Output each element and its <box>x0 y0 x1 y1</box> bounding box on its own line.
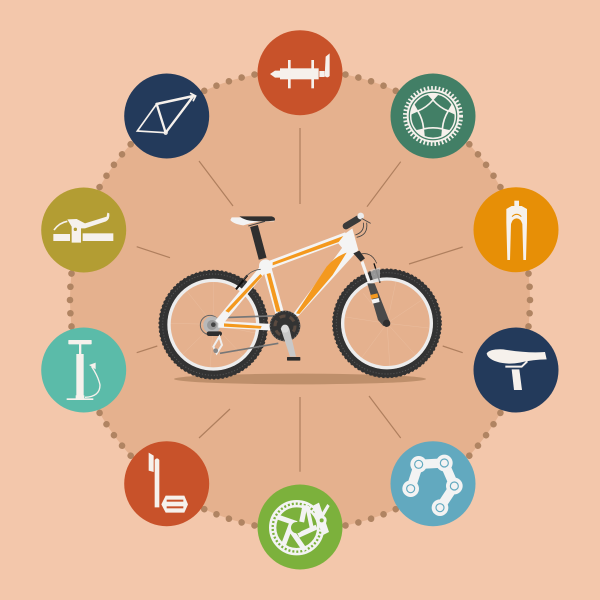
saddle <box>230 216 275 226</box>
icon: bike frame <box>124 74 209 158</box>
seat tube <box>267 267 281 317</box>
icon: pedal and crank <box>124 441 209 526</box>
cassette <box>200 315 221 335</box>
seat cluster <box>259 259 272 273</box>
chain <box>220 316 278 353</box>
rear wheel <box>160 271 267 378</box>
icon: suspension fork <box>474 187 558 272</box>
icon: saddle <box>474 328 558 412</box>
top tube <box>265 236 347 267</box>
front wheel <box>333 270 441 377</box>
rear brake <box>236 269 261 289</box>
icon: hub <box>258 30 342 115</box>
icon: floor pump <box>41 328 126 412</box>
front fork <box>353 251 390 327</box>
ground shadow <box>174 374 426 384</box>
crankset <box>270 311 300 361</box>
icon: chainring <box>390 74 476 158</box>
seat stay <box>218 267 265 323</box>
bicycle <box>160 213 441 384</box>
central disc <box>70 70 530 530</box>
frame stripes <box>224 236 347 329</box>
rear derailleur <box>207 331 222 353</box>
connector lines <box>137 128 463 472</box>
dotted ring <box>67 69 533 531</box>
icon: brake lever <box>41 188 126 272</box>
frame <box>218 228 358 329</box>
icon: chain <box>390 441 476 526</box>
icon: disc brake <box>258 484 342 570</box>
handlebar <box>346 213 371 237</box>
head tube <box>338 228 358 253</box>
down tube <box>291 242 358 317</box>
seatpost <box>254 226 263 259</box>
chain stay <box>218 324 273 327</box>
